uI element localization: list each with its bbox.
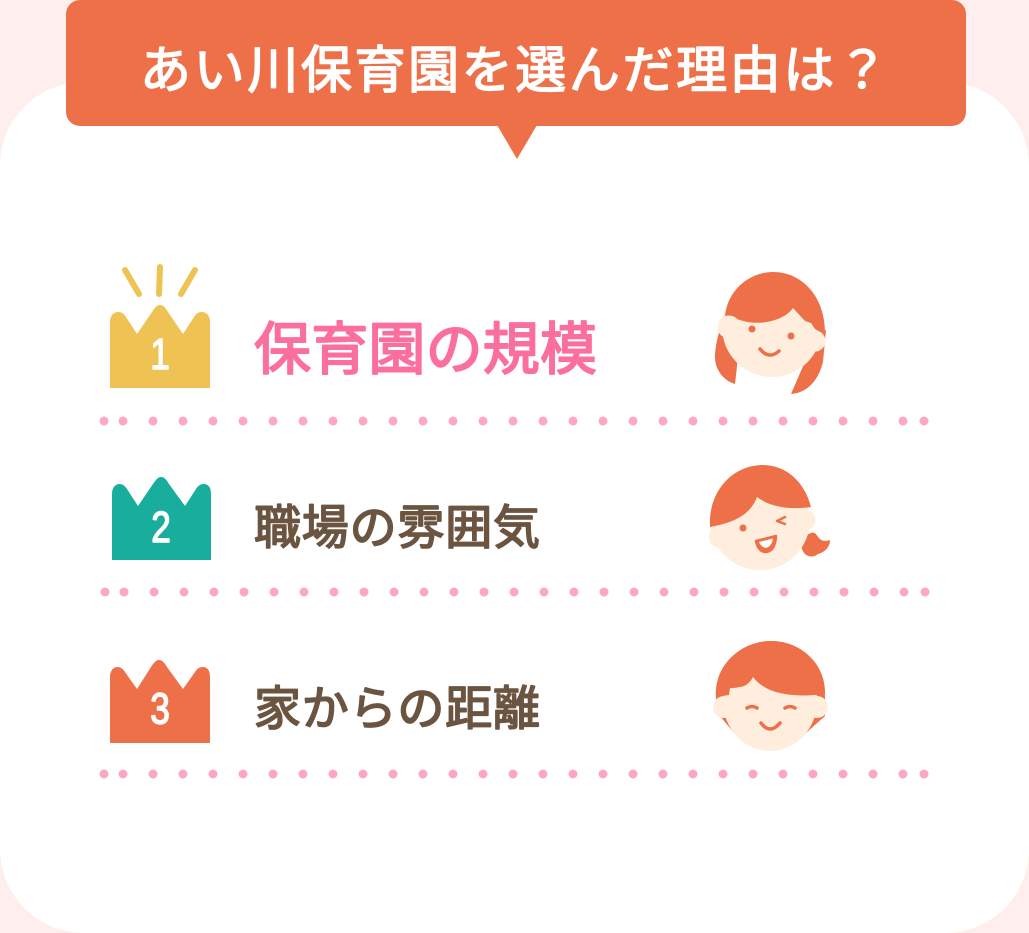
rank 1 crown with sparkle (110, 267, 210, 388)
face 1: girl with long hair (715, 272, 826, 394)
rank 1 label: 保育園の規模 (254, 318, 597, 382)
dotted divider 3 (100, 770, 928, 778)
rank 1 crown with sparkle: 1 (150, 330, 170, 379)
title banner (66, 0, 966, 159)
rank 2 crown: 2 (151, 503, 171, 552)
rank 2 crown (112, 477, 211, 560)
rank 2 label: 職場の雰囲気 (254, 501, 540, 554)
face 3: smiling boy (713, 641, 828, 751)
rank 3 label: 家からの距離 (254, 682, 540, 735)
rank 3 crown (110, 660, 210, 743)
dotted divider 1 (100, 416, 928, 426)
rank 3 crown: 3 (150, 685, 170, 733)
face 2: winking girl with ponytail (709, 465, 830, 570)
dotted divider 2 (100, 588, 930, 596)
title banner: あい川保育園を選んだ理由は？ (140, 42, 888, 99)
